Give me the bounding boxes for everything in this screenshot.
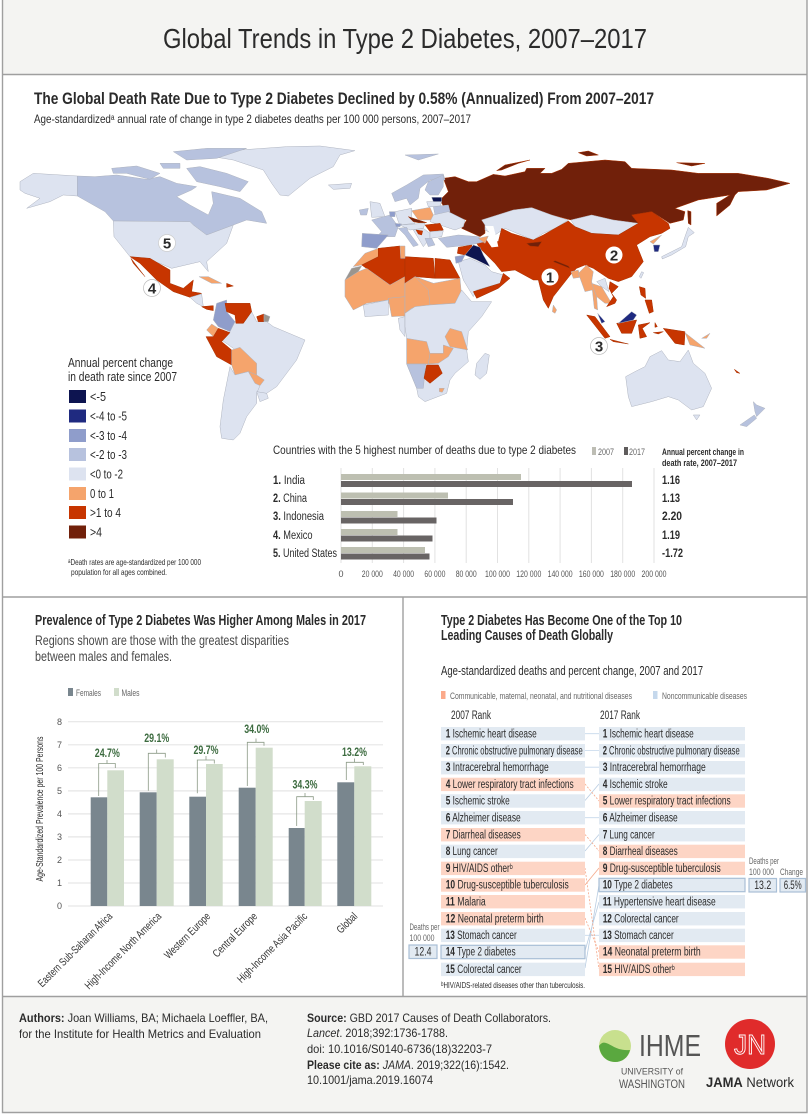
2007 rank list: 3 Intracerebral hemorrhage — [446, 762, 549, 774]
JAMA Network logo: JAMA Network — [706, 1075, 794, 1090]
panel: leading causes heading: Type 2 Diabetes Has Become One of the Top 10 — [441, 613, 682, 629]
map subheading: annual rate of change in type 2 diabetes deaths per 100 000 persons, 2007–2017 — [114, 112, 471, 126]
top five countries bar chart: 3. Indonesia — [273, 511, 324, 523]
rank footnote: HIV/AIDS-related diseases other than tuberculosis. — [443, 980, 585, 990]
annual change column: Annual percent change in — [662, 447, 744, 457]
source citation: 10.1001/jama.2019.16074 — [307, 1073, 433, 1087]
map footnote: Death rates are age-standardized per 100 000 — [71, 557, 201, 567]
top five countries bar chart: 100 000 — [485, 569, 510, 579]
top five countries bar chart: Countries with the 5 highest number of deaths due to type 2 diabetes — [273, 443, 576, 457]
source citation: doi: 10.1016/S0140-6736(18)32203-7 — [307, 1042, 492, 1056]
panel: leading causes heading — [441, 613, 682, 644]
annual change column: 1.13 — [662, 493, 680, 505]
top five countries bar chart: 140 000 — [548, 569, 573, 579]
prevalence bar chart: 7 — [57, 740, 62, 750]
panel: prevalence subtitle: between males and females. — [35, 648, 172, 664]
prevalence bar chart: 34.0% — [244, 722, 269, 736]
top five countries bar chart: 2. China — [273, 493, 307, 505]
prevalence bar chart: 5 — [57, 786, 62, 796]
2007 rank list: 1 Ischemic heart disease — [446, 728, 537, 740]
prevalence bar chart: High-Income Asia Pacific — [235, 910, 310, 986]
source citation: Please cite as: JAMA. 2019;322(16):1542. — [307, 1058, 509, 1072]
2017 deaths and change callout: 100 000 — [749, 867, 774, 878]
rank headers: 2007 Rank — [451, 710, 491, 722]
map subheading: Age-standardized — [34, 112, 128, 126]
authors — [19, 1011, 268, 1041]
prevalence bar chart: Global — [335, 911, 360, 936]
top five countries bar chart: 200 000 — [642, 569, 666, 579]
prevalence bar chart: High-Income North America — [83, 910, 165, 992]
map footnote: population for all ages combined. — [71, 567, 167, 577]
JAMA Network logo — [706, 1019, 794, 1090]
prevalence bar chart: 2 — [57, 855, 62, 865]
annual change column: -1.72 — [662, 548, 683, 560]
map: Eurasia, Africa, Oceania — [405, 151, 790, 427]
2007 rank list: 15 Colorectal cancer — [446, 964, 522, 976]
2017 rank list: 12 Colorectal cancer — [603, 913, 679, 925]
prevalence bar chart: 8 — [57, 717, 62, 727]
world map — [20, 146, 790, 440]
2007 deaths callout: 100 000 — [410, 933, 434, 944]
top five countries bar chart: 60 000 — [424, 569, 445, 579]
prevalence legend — [68, 688, 140, 699]
rank headers — [451, 710, 640, 722]
2017 rank list: 2 Chronic obstructive pulmonary disease — [603, 745, 740, 757]
2017 deaths and change callout: 6.5% — [784, 880, 802, 892]
2017 rank list: 6 Alzheimer disease — [603, 812, 678, 824]
2017 rank list: b — [672, 965, 675, 972]
rank legend: Noncommunicable diseases — [662, 691, 747, 701]
map heading: The Global Death Rate Due to Type 2 Diabetes Declined by 0.58% (Annualized) From 2007–2017 — [34, 90, 654, 108]
2007 rank list: 14 Type 2 diabetes — [446, 947, 516, 959]
rank legend: Communicable, maternal, neonatal, and nutritional diseases — [450, 691, 632, 701]
chart legend — [592, 447, 645, 458]
prevalence bar chart: Central Europe — [211, 911, 260, 960]
2007 rank list: b — [510, 864, 513, 871]
marker 2: 2 — [610, 248, 618, 264]
panel: prevalence subtitle — [35, 632, 289, 664]
2007 rank list: 6 Alzheimer disease — [446, 812, 521, 824]
IHME logo — [599, 1028, 701, 1091]
2007 rank list: 8 Lung cancer — [446, 846, 498, 858]
2017 rank list: 13 Stomach cancer — [603, 930, 674, 942]
top five countries bar chart: 160 000 — [579, 569, 604, 579]
prevalence bar chart: 6 — [57, 763, 62, 773]
2007 rank list: 7 Diarrheal diseases — [446, 829, 521, 841]
map legend: <-5 — [90, 390, 106, 404]
source citation — [307, 1011, 551, 1087]
prevalence bar chart — [35, 717, 383, 992]
2007 rank list: 5 Ischemic stroke — [446, 796, 510, 808]
top five countries bar chart: 1. India — [273, 475, 306, 487]
marker 4: 4 — [148, 280, 157, 298]
prevalence legend: Males — [122, 688, 140, 699]
top five countries bar chart: 40 000 — [393, 569, 414, 579]
prevalence bar chart: 29.7% — [194, 743, 219, 757]
top five countries bar chart: 80 000 — [456, 569, 477, 579]
2017 rank list: 1 Ischemic heart disease — [603, 728, 694, 740]
brackets — [99, 738, 363, 826]
panel: prevalence subtitle: Regions shown are those with the greatest disparities — [35, 632, 289, 648]
map legend: Annual percent change — [68, 356, 173, 370]
2017 rank list: 14 Neonatal preterm birth — [603, 947, 701, 959]
source citation: Lancet. 2018;392:1736-1788. — [307, 1026, 448, 1040]
marker 3: 3 — [595, 338, 603, 356]
prevalence bar chart: 1 — [57, 878, 62, 888]
panel: prevalence heading: Prevalence of Type 2 Diabetes Was Higher Among Males in 2017 — [35, 613, 366, 629]
2007 rank list — [441, 727, 585, 976]
map legend: <-3 to -4 — [90, 429, 127, 443]
region labels: Eastern Sub-Saharan Africa — [36, 910, 116, 990]
2017 deaths and change callout: Deaths per — [749, 856, 779, 867]
source citation: Source: GBD 2017 Causes of Death Collaborators. — [307, 1011, 551, 1025]
map: Europe and Middle East — [389, 174, 490, 267]
marker 1 — [542, 268, 558, 286]
2017 rank list: 8 Diarrheal diseases — [603, 846, 678, 858]
top five countries bar chart: 120 000 — [516, 569, 541, 579]
2007 rank list: 10 Drug-susceptible tuberculosis — [446, 880, 569, 892]
2007 deaths callout — [409, 922, 440, 958]
map legend: <-4 to -5 — [90, 410, 127, 424]
IHME logo: IHME — [639, 1028, 701, 1063]
annual change column — [662, 447, 744, 560]
map footnote: a — [68, 559, 71, 565]
prevalence bar chart: Western Europe — [162, 911, 213, 962]
connectors between ranks — [585, 734, 599, 969]
2017 rank list: 15 HIV/AIDS other — [603, 964, 694, 976]
annual change column: 2.20 — [662, 511, 682, 523]
rank footnote: b — [441, 982, 444, 988]
title: Global Trends in Type 2 Diabetes, 2007–2017 — [163, 23, 647, 54]
top five countries bar chart: 180 000 — [610, 569, 635, 579]
IHME logo: WASHINGTON — [619, 1079, 685, 1091]
map legend: <0 to -2 — [90, 468, 123, 482]
authors: for the Institute for Health Metrics and Evaluation — [19, 1027, 261, 1041]
prevalence bar chart: 29.1% — [144, 731, 169, 745]
marker 5: 5 — [163, 236, 171, 252]
map legend: <-2 to -3 — [90, 448, 127, 462]
top five countries bar chart: 0 — [338, 569, 344, 579]
map legend — [68, 356, 177, 540]
2007 rank list: 2 Chronic obstructive pulmonary disease — [446, 745, 583, 757]
2007 rank list: 13 Stomach cancer — [446, 930, 517, 942]
2007 deaths callout: Deaths per — [410, 922, 440, 933]
annual change column: death rate, 2007–2017 — [662, 458, 737, 468]
map footnote — [68, 557, 201, 577]
panel: leading causes heading: Leading Causes of Death Globally — [441, 628, 613, 644]
2017 deaths and change callout — [749, 856, 806, 892]
footer band — [2, 997, 807, 1112]
prevalence bar chart: 3 — [57, 832, 62, 842]
map legend: >4 — [90, 526, 102, 540]
prevalence bar chart: 0 — [57, 901, 62, 911]
2007 rank list: 4 Lower respiratory tract infections — [446, 779, 574, 791]
prevalence legend: Females — [76, 688, 101, 699]
2007 rank list: 12 Neonatal preterm birth — [446, 913, 544, 925]
top five countries bar chart: 5. United States — [273, 548, 337, 560]
map: Americas and Western Europe — [20, 146, 405, 440]
top five countries bar chart: 4. Mexico — [273, 530, 312, 542]
2017 rank list: 3 Intracerebral hemorrhage — [603, 762, 706, 774]
2017 deaths and change callout: 13.2 — [754, 880, 771, 892]
top five countries bar chart: 20 000 — [362, 569, 383, 579]
rank headers: 2017 Rank — [600, 710, 640, 722]
marker 5 — [158, 234, 176, 252]
marker 1: 1 — [546, 270, 554, 286]
2007 deaths callout: 12.4 — [414, 946, 432, 958]
chart legend: 2017 — [629, 447, 645, 458]
prevalence bar chart: Age-Standardized Prevalence per 100 Persons — [35, 736, 46, 882]
leading causes subtitle: Age-standardized deaths and percent change, 2007 and 2017 — [441, 663, 703, 678]
2017 rank list — [599, 727, 745, 976]
marker 2 — [606, 246, 622, 264]
marker 3 — [590, 338, 608, 356]
prevalence bar chart: 4 — [57, 809, 62, 819]
prevalence bar chart: 24.7% — [95, 746, 120, 760]
2007 rank list: 11 Malaria — [446, 896, 486, 908]
2017 rank list: 9 Drug-susceptible tuberculosis — [603, 863, 721, 875]
annual change column: 1.16 — [662, 475, 680, 487]
2017 rank list: 5 Lower respiratory tract infections — [603, 796, 731, 808]
2017 rank list: 7 Lung cancer — [603, 829, 655, 841]
marker 4 — [144, 280, 160, 298]
JAMA Network logo: JN — [734, 1029, 766, 1060]
2007 rank list: 9 HIV/AIDS other — [446, 863, 532, 875]
map legend: 0 to 1 — [90, 487, 114, 501]
IHME logo: UNIVERSITY of — [621, 1066, 683, 1076]
map subheading: a — [111, 113, 115, 122]
top five countries bar chart — [273, 443, 744, 579]
2017 rank list: 10 Type 2 diabetes — [603, 880, 673, 892]
prevalence bar chart: 13.2% — [342, 745, 367, 759]
2017 rank list: 11 Hypertensive heart disease — [603, 896, 716, 908]
prevalence bar chart: 34.3% — [292, 778, 318, 792]
chart legend: 2007 — [598, 447, 614, 458]
2017 rank list: 4 Ischemic stroke — [603, 779, 668, 791]
authors: Authors: Joan Williams, BA; Michaela Loeffler, BA, — [19, 1011, 268, 1025]
map legend: in death rate since 2007 — [68, 370, 177, 384]
header band — [2, 0, 807, 74]
annual change column: 1.19 — [662, 530, 680, 542]
map legend: >1 to 4 — [90, 506, 121, 520]
